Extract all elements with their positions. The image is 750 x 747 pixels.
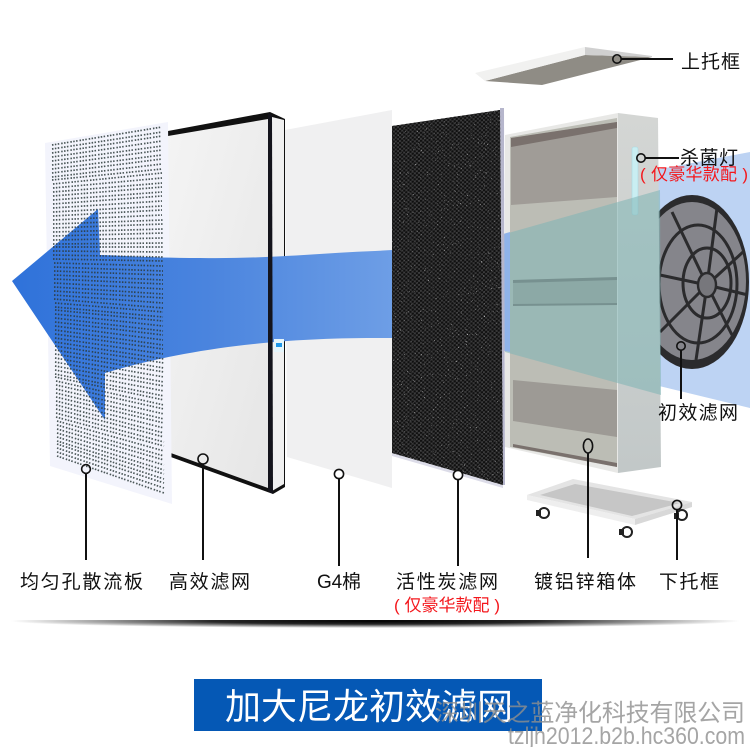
label: lower tray: 下托框 — [659, 571, 719, 593]
label: deluxe model only, carbon: ( 仅豪华款配 ) — [394, 595, 500, 615]
watermark: 深圳天之蓝净化科技有限公司 — [435, 700, 745, 727]
round primary filter — [658, 195, 749, 369]
leader: HEPA filter — [198, 454, 208, 560]
title banner — [194, 679, 542, 731]
diffuser plate holes — [52, 127, 164, 493]
airflow beam through box — [500, 190, 661, 395]
label: upper tray: 上托框 — [681, 51, 740, 73]
high efficiency filter — [168, 112, 285, 494]
label: HEPA filter: 高效滤网 — [169, 571, 250, 593]
perforated diffuser plate — [45, 122, 172, 504]
label: diffuser plate: 均匀孔散流板 — [20, 571, 143, 593]
leader: germicidal lamp — [637, 154, 679, 162]
leader: carbon filter — [453, 470, 463, 566]
label: G4 cotton: G4棉 — [317, 571, 361, 593]
watermark — [435, 700, 745, 747]
label: germicidal lamp: 杀菌灯 — [680, 147, 738, 169]
HEPA frame post and tag — [268, 113, 284, 494]
germicidal UV lamp — [632, 147, 638, 215]
activated carbon filter — [390, 105, 506, 490]
leader: box body — [583, 439, 593, 558]
G4 cotton filter — [285, 110, 392, 488]
divider shadow — [18, 620, 732, 628]
leader: lower tray — [672, 500, 682, 560]
label: box body: 镀铝锌箱体 — [534, 571, 636, 593]
upper tray frame — [475, 47, 652, 85]
leader: G4 cotton — [334, 469, 344, 566]
main blue airflow arrow — [12, 209, 392, 420]
leader: diffuser plate — [82, 465, 90, 560]
leader: upper tray — [613, 55, 673, 63]
galvanized aluminium-zinc box body — [505, 113, 661, 473]
title banner: 加大尼龙初效滤网 — [225, 686, 513, 727]
leader: primary filter — [677, 342, 685, 399]
label: primary filter: 初效滤网 — [658, 402, 738, 424]
label: deluxe model only, lamp: ( 仅豪华款配 ) — [640, 164, 748, 184]
label: carbon filter: 活性炭滤网 — [396, 571, 498, 593]
airflow beam behind the rear filter — [655, 152, 750, 408]
lower tray with casters — [527, 479, 692, 537]
